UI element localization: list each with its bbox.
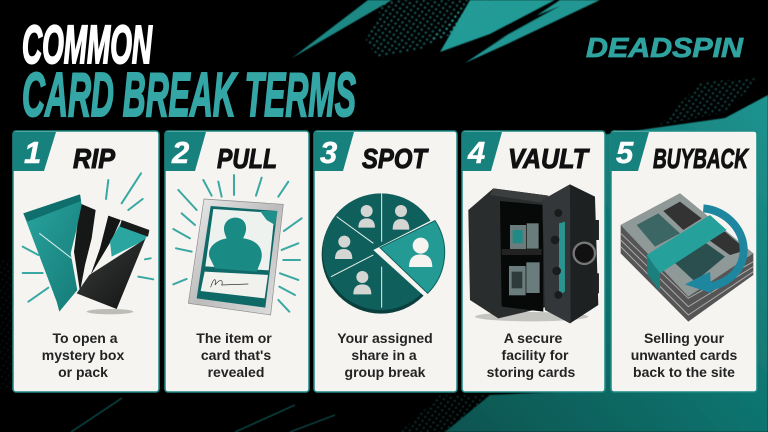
player silhouette: [209, 218, 262, 272]
icon: open safe: [468, 184, 599, 323]
number tab 3: [314, 132, 354, 171]
panel: pull: [165, 131, 309, 392]
number tab 5: 5: [616, 135, 634, 170]
number tab 5: [611, 132, 649, 171]
description: spot: group break: [345, 364, 426, 380]
number tab 4: 4: [467, 135, 485, 170]
number tab 4: [462, 132, 502, 171]
title line: card break terms: CARD BREAK TERMS: [22, 61, 356, 130]
description: rip: or pack: [58, 364, 108, 380]
people: [335, 205, 409, 294]
description: spot: share in a: [351, 347, 417, 363]
description: rip: To open a: [52, 330, 118, 346]
panel: vault: [462, 131, 605, 392]
heading: pull: PULL: [217, 143, 277, 174]
number tab 1: 1: [24, 135, 41, 170]
description: pull: card that's: [201, 347, 271, 363]
description: vault: [487, 330, 576, 380]
heading: spot: SPOT: [362, 143, 429, 174]
icon: graded card: [173, 175, 302, 315]
title line: common: COMMON: [22, 15, 153, 75]
logo: deadspin: DEADSPIN: [586, 32, 744, 63]
description: pull: The item or: [196, 330, 272, 346]
description: buyback: [631, 330, 737, 380]
description: vault: storing cards: [487, 364, 576, 380]
number tab 3: 3: [320, 135, 337, 170]
description: rip: mystery box: [42, 347, 124, 363]
description: vault: facility for: [502, 347, 569, 363]
description: spot: Your assigned: [337, 330, 433, 346]
panel: buyback: [611, 131, 757, 392]
panel: spot: [314, 131, 457, 392]
heading: rip: RIP: [73, 143, 115, 174]
heading: vault: VAULT: [508, 143, 591, 174]
description: buyback: back to the site: [633, 364, 735, 380]
description: vault: A secure: [504, 330, 563, 346]
icon: torn packs: [23, 173, 153, 314]
stored cards: [509, 223, 540, 295]
arrow: [703, 208, 744, 287]
description: pull: revealed: [208, 364, 264, 380]
band: [647, 215, 727, 273]
icon: card stack with return arrow: [621, 193, 753, 322]
description: buyback: Selling your: [644, 330, 725, 346]
icon: pie with highlighted share: [322, 193, 448, 314]
door: [542, 184, 598, 323]
title: [22, 15, 356, 130]
panel: rip: [13, 131, 159, 392]
number tab 1: [13, 132, 56, 171]
number tab 2: [165, 132, 206, 171]
description: rip: [42, 330, 124, 380]
description: spot: [337, 330, 433, 380]
description: buyback: unwanted cards: [631, 347, 737, 363]
description: pull: [196, 330, 272, 380]
number tab 2: 2: [171, 135, 189, 170]
